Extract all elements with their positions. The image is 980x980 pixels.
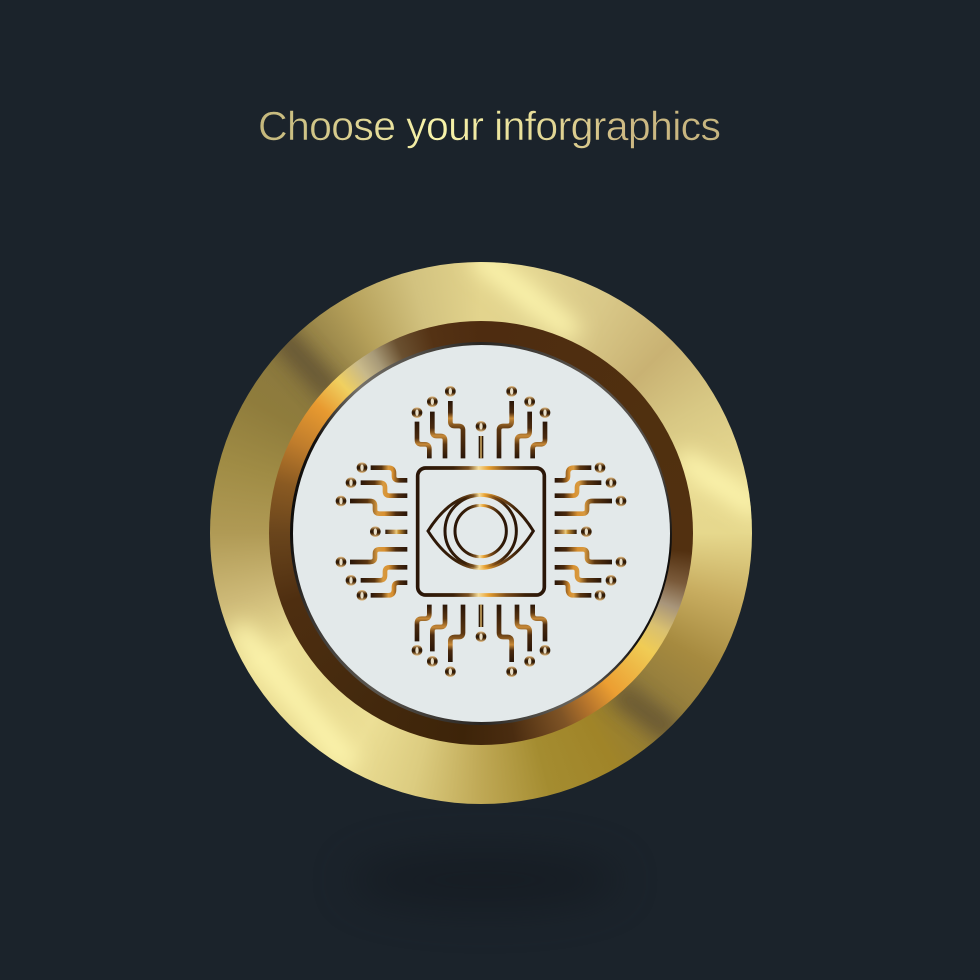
circuit traces: top left quadrant <box>336 386 463 514</box>
circuit traces: bottom left quadrant <box>336 549 463 677</box>
gold button <box>210 262 752 804</box>
ring sheen bands <box>226 262 752 772</box>
pupil <box>455 505 506 557</box>
eye <box>428 494 533 568</box>
center traces <box>370 421 592 642</box>
outer gold ring <box>210 262 752 804</box>
title: Choose your inforgraphics <box>258 103 721 149</box>
circuit traces: bottom right quadrant <box>499 549 626 677</box>
inner bronze ring <box>269 321 693 745</box>
iris <box>445 495 516 567</box>
light disk <box>293 345 670 722</box>
chip outline <box>418 468 544 595</box>
disk edge <box>290 342 672 725</box>
floor shadow <box>350 850 620 910</box>
eye almond <box>428 494 533 568</box>
circuit traces: top right quadrant <box>499 386 626 514</box>
